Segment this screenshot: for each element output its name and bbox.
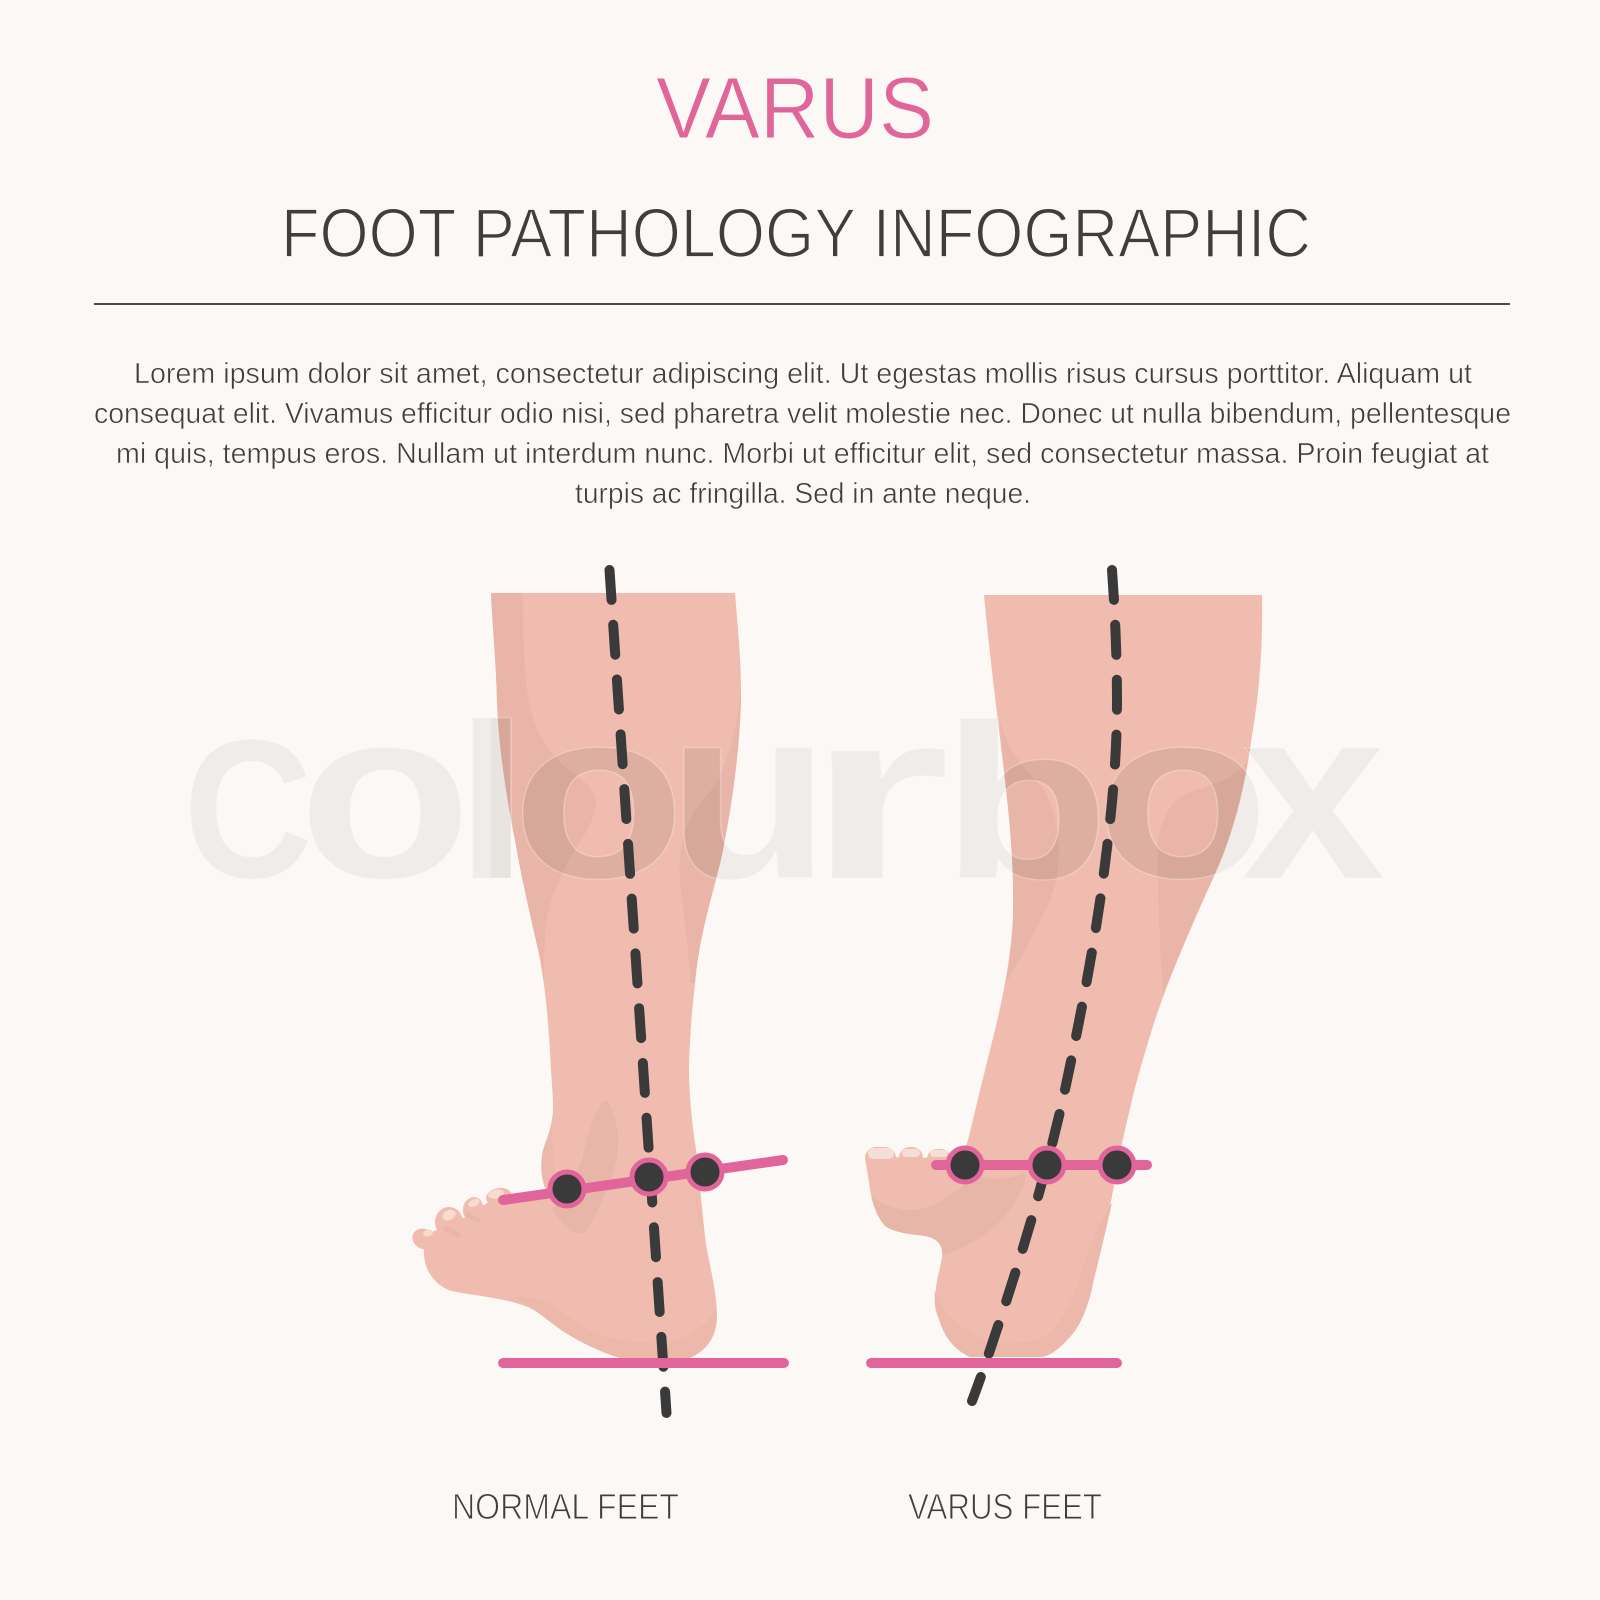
watermark [191, 717, 1382, 880]
marker: outer ankle [1100, 1148, 1134, 1182]
achilles shading [695, 1190, 705, 1237]
normal foot ankle line with markers [503, 1155, 783, 1206]
varus foot ankle line with markers [936, 1148, 1147, 1182]
heel and arch shading [513, 1297, 716, 1358]
heel shading [935, 1203, 1112, 1357]
watermark: x [1241, 655, 1386, 930]
toe: third toe [460, 1195, 486, 1223]
toes [865, 1147, 951, 1169]
intro paragraph [94, 358, 1511, 510]
toe: big toe [485, 1186, 513, 1208]
watermark: b [941, 679, 1110, 925]
normal foot axis dashed line [610, 570, 666, 1413]
watermark: l [453, 679, 531, 925]
watermark: o [512, 659, 686, 928]
intro paragraph: Lorem ipsum dolor sit amet, consectetur adipiscing elit. Ut egestas mollis risus cursus porttitor. Aliquam ut [134, 358, 1472, 390]
watermark: o [1096, 659, 1270, 928]
right calf shading [679, 690, 741, 983]
intro paragraph: turpis ac fringilla. Sed in ante neque. [575, 478, 1031, 510]
foot underside shading [872, 1172, 1025, 1255]
illustration: normal foot leg [409, 593, 741, 1358]
watermark: l [453, 679, 531, 925]
watermark: x [1241, 655, 1386, 930]
ankle side bump shading [541, 1107, 558, 1190]
leg and foot silhouette [424, 593, 741, 1358]
marker: inner ankle [550, 1172, 584, 1206]
marker: centre [632, 1160, 666, 1194]
left calf shading [491, 593, 596, 983]
divider rule [94, 303, 1510, 305]
watermark: r [806, 660, 951, 930]
illustration: varus foot leg [865, 595, 1262, 1357]
label: varus feet: VARUS FEET [908, 1486, 1102, 1527]
varus foot axis dashed line [972, 570, 1117, 1401]
watermark: u [667, 656, 830, 930]
ankle bone shading [553, 1100, 618, 1233]
marker: centre [1030, 1148, 1064, 1182]
toenails [868, 1148, 948, 1159]
watermark: b [941, 679, 1110, 925]
watermark: C [183, 700, 313, 920]
watermark: u [667, 656, 830, 930]
intro paragraph: mi quis, tempus eros. Nullam ut interdum nunc. Morbi ut efficitur elit, sed consectetur massa. Proin feugiat at [116, 438, 1489, 470]
right calf shading [1158, 760, 1248, 993]
toenails [422, 1188, 505, 1238]
normal foot ground line [503, 1358, 784, 1368]
subtitle: foot pathology infographic: FOOT PATHOLOGY INFOGRAPHIC [281, 194, 1311, 272]
toe: little toe [409, 1225, 439, 1253]
toe: fourth toe [435, 1207, 463, 1237]
marker: outer ankle [688, 1155, 722, 1189]
title: VARUS: VARUS [656, 60, 934, 157]
marker: inner ankle [948, 1148, 982, 1182]
watermark: o [298, 659, 472, 928]
leg and foot silhouette [865, 595, 1262, 1357]
watermark: o [1096, 659, 1270, 928]
varus foot ground line [871, 1358, 1117, 1368]
toe creases [445, 1215, 478, 1235]
left calf shading [999, 717, 1059, 985]
intro paragraph: consequat elit. Vivamus efficitur odio nisi, sed pharetra velit molestie nec. Donec ut nulla bibendum, pellentesque [94, 398, 1511, 430]
label: normal feet: NORMAL FEET [452, 1486, 679, 1527]
watermark: o [512, 659, 686, 928]
